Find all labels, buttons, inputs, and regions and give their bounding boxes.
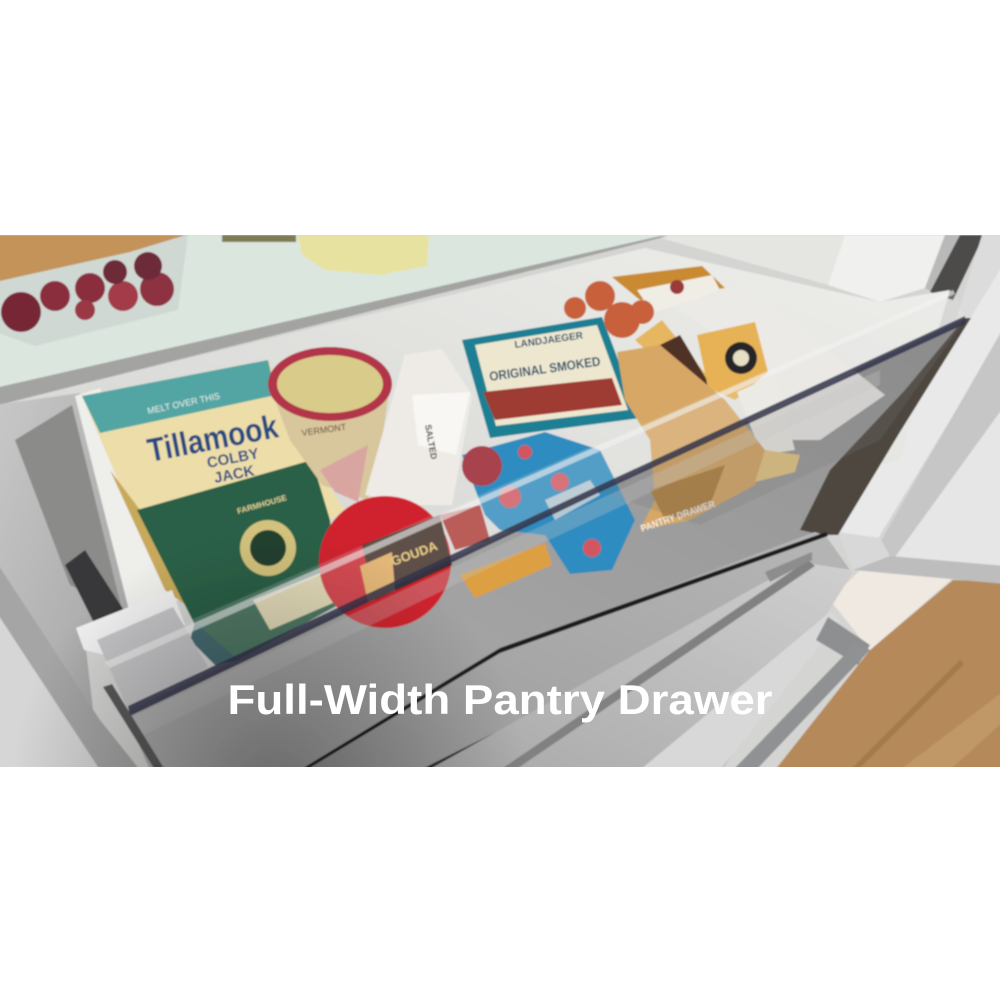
dark gap beside drawer bbox=[800, 318, 971, 535]
freezer drawer handle bbox=[733, 617, 870, 770]
yellow container on shelf bbox=[298, 235, 429, 275]
kraft wrapped cheese: PANTRY DRAWER bbox=[639, 499, 717, 535]
food container with grapes bbox=[0, 235, 188, 346]
package: Tillamook cheese bbox=[82, 360, 345, 612]
package: Tillamook cheese: JACK bbox=[213, 462, 256, 487]
drawer floor behind the clear front bbox=[125, 318, 965, 770]
red gouda wheel: GOUDA bbox=[389, 538, 440, 569]
package: Tillamook cheese: MELT OVER THIS bbox=[146, 391, 221, 416]
kraft wrapped cheese bbox=[617, 345, 800, 535]
drawer interior back wall bbox=[138, 248, 951, 505]
title: Full-Width Pantry Drawer bbox=[228, 676, 772, 723]
package: landjaeger original smoked bbox=[462, 317, 640, 438]
package: green farmhouse cheddar bbox=[137, 460, 338, 665]
red gouda wheel bbox=[319, 496, 490, 628]
package: Tillamook cheese: COLBY bbox=[206, 445, 260, 472]
package: landjaeger original smoked: LANDJAEGER bbox=[514, 330, 584, 351]
shelf front silver edge bbox=[0, 236, 668, 406]
cabinet base bbox=[830, 570, 953, 650]
wood floor bbox=[775, 580, 1000, 770]
butter roll: SALTED bbox=[423, 424, 439, 461]
wrapped cheeses at back bbox=[612, 266, 885, 455]
lower freezer drawer plates bbox=[300, 532, 853, 770]
bottom shadow bbox=[39, 558, 498, 767]
left side of drawer and cabinet bbox=[0, 388, 180, 770]
glass shelf bbox=[0, 235, 665, 388]
tub: creme fraiche: VERMONT bbox=[301, 422, 347, 438]
tub: creme fraiche bbox=[268, 347, 392, 502]
package: Tillamook cheese: Tillamook bbox=[144, 407, 281, 469]
butter roll bbox=[365, 349, 472, 505]
photo: open refrigerator pantry drawer bbox=[0, 230, 1000, 775]
blue netted cheeses bbox=[462, 432, 635, 574]
drawer front clear panel bbox=[76, 290, 965, 770]
cheese bar bbox=[460, 543, 552, 598]
package: landjaeger original smoked: ORIGINAL SMOKED bbox=[488, 354, 601, 384]
orange netted sausages bbox=[564, 281, 654, 338]
package: green farmhouse cheddar: FARMHOUSE bbox=[236, 493, 288, 516]
right door and frame bbox=[838, 235, 1000, 584]
upper inner door panels bbox=[650, 235, 945, 302]
